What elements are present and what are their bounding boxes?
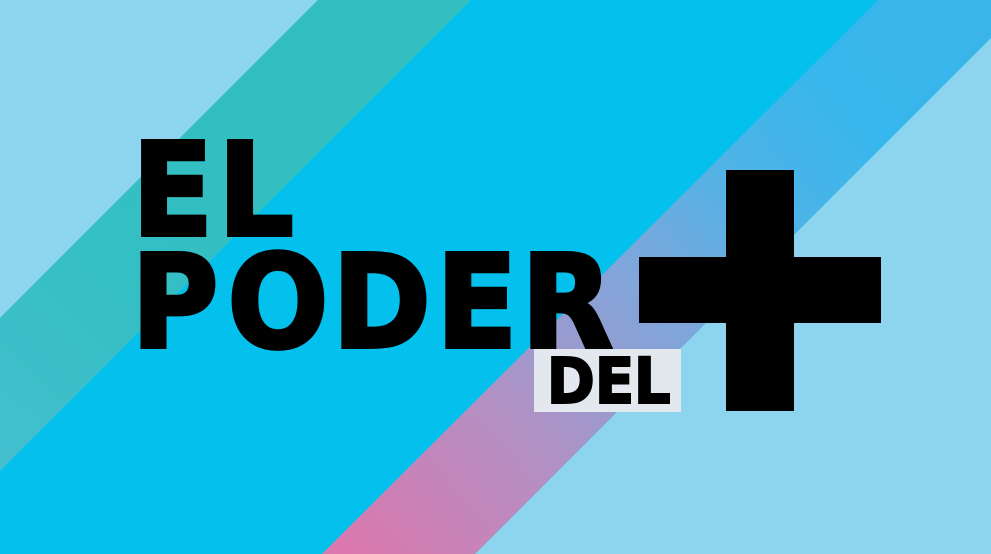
icon: plus sign [639, 170, 881, 411]
band: pink to blue gradient stripe [322, 0, 991, 554]
band: bottom-right light blue [475, 38, 991, 554]
band: top-left light blue [0, 0, 318, 318]
label: DEL: DEL [547, 346, 671, 419]
band: teal stripe [0, 0, 471, 471]
title: PODER: PODER [131, 228, 613, 378]
title: EL: EL [132, 116, 294, 266]
